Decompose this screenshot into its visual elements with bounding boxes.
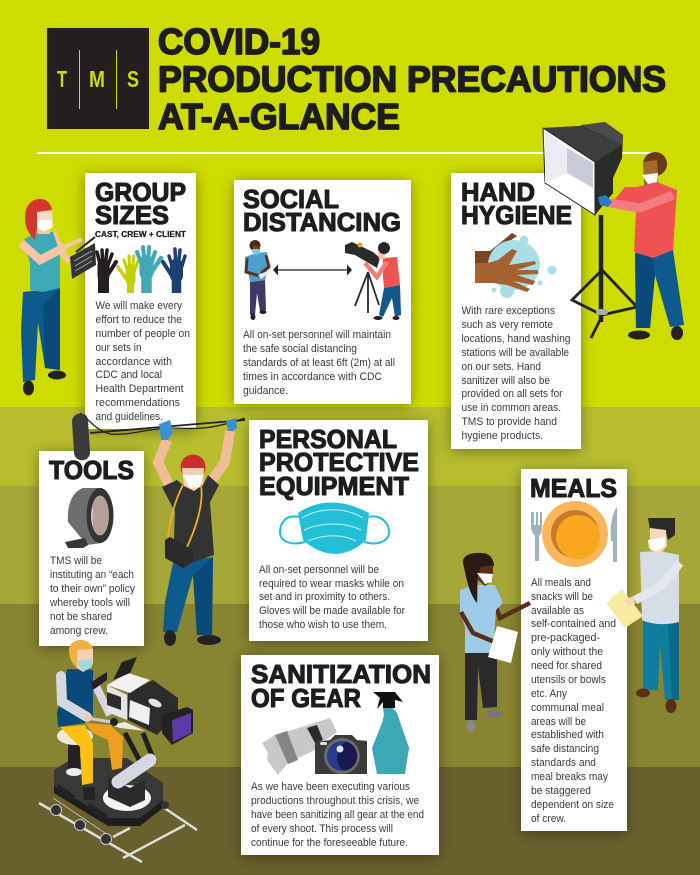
text: hand hygiene (462, 305, 570, 442)
text: meals: pre-packaged- (531, 632, 600, 644)
dolly platform (50, 758, 169, 844)
text: hand hygiene: locations, hand washing (462, 333, 570, 345)
text: sanitization of gear: productions throughout this crisis, we (251, 795, 419, 807)
text: hand hygiene: such as very remote (462, 319, 553, 331)
panel: social distancing (234, 180, 411, 404)
text: meals: etc. Any (531, 688, 567, 700)
text: tools: instituting an “each (50, 569, 134, 581)
text: meals: available as (531, 605, 584, 617)
text: group sizes: effort to reduce the (96, 314, 182, 326)
text: meals: be staggered (531, 785, 591, 797)
heading: personal protective equipment: PERSONAL (259, 424, 397, 454)
logo: TMS: T (57, 66, 67, 92)
figure: boom operator (158, 431, 230, 646)
light stand (572, 215, 637, 338)
title: AT-A-GLANCE (158, 96, 400, 137)
heading: group sizes (95, 177, 186, 239)
heading: sanitization of gear (251, 659, 431, 713)
text: personal protective equipment: All on-set personnel will be (259, 564, 379, 576)
heading: hand hygiene: HAND (461, 177, 535, 207)
text: personal protective equipment: those who wish to use them. (259, 619, 387, 631)
text: hand hygiene: use in common areas. (462, 402, 561, 414)
text: meals: established with (531, 729, 604, 741)
text: group sizes: Health Department (96, 383, 184, 395)
text: personal protective equipment: Gloves will be made available for (259, 605, 405, 617)
title: COVID-19 (158, 21, 320, 62)
text: hand hygiene: hygiene products. (462, 430, 543, 442)
text: meals: need for shared (531, 660, 602, 672)
text: social distancing: All on-set personnel will maintain (243, 329, 391, 341)
heading: hand hygiene: HYGIENE (461, 200, 572, 230)
figure: man with paper (606, 518, 680, 713)
text: personal protective equipment: set and in proximity to others. (259, 591, 390, 603)
text: meals: communal meal (531, 702, 604, 714)
text: group sizes: and guidelines. (96, 411, 163, 423)
heading: sanitization of gear: OF GEAR (251, 683, 361, 713)
heading: group sizes: GROUP (95, 177, 186, 207)
text: tools: whereby tools will (49, 597, 130, 609)
text: tools: among crew. (50, 625, 108, 637)
text: tools: to their own” policy (50, 583, 135, 595)
figure: crew member adjusting softbox light (543, 122, 684, 340)
panel: hand hygiene (451, 173, 581, 449)
text: social distancing: times in accordance with CDC (243, 371, 382, 383)
text: hand hygiene: stations will be available (462, 347, 569, 359)
text: hand hygiene: sanitizer will also be (462, 375, 550, 387)
heading: hand hygiene (461, 177, 572, 230)
heading: group sizes: CAST, CREW + CLIENT (95, 230, 186, 239)
text: meals: dependent on size (531, 799, 614, 811)
text: group sizes: accordance with (96, 356, 172, 368)
text: meals: only without the (531, 646, 603, 658)
camera arm (118, 733, 155, 782)
text: meals: All meals and (531, 577, 591, 589)
text: meals: meal breaks may (531, 771, 608, 783)
text: sanitization of gear: continue for the foreseeable future. (251, 837, 408, 849)
text: tools: TMS will be (50, 555, 102, 567)
panel: sanitization of gear (241, 655, 439, 855)
operator (57, 640, 123, 800)
heading: tools: TOOLS (49, 455, 134, 485)
text: personal protective equipment: required to wear masks while on (259, 578, 404, 590)
logo: TMS: M (89, 66, 105, 92)
icon: plate, fork and knife (531, 501, 617, 567)
text: group sizes: CDC and local (96, 369, 162, 381)
title (158, 21, 666, 137)
icon: spray bottle (372, 692, 409, 774)
text: meals (531, 577, 616, 825)
icon: washing hands with bubbles (475, 233, 556, 298)
text: hand hygiene: With rare exceptions (462, 305, 555, 317)
heading: personal protective equipment: EQUIPMENT (259, 471, 409, 501)
text: group sizes (96, 300, 190, 423)
panel: personal protective equipment (249, 420, 428, 641)
text: meals: standards and (531, 757, 596, 769)
seat (57, 727, 93, 776)
figure: masked person in blue (245, 240, 270, 320)
text: hand hygiene: on our sets. Hand (462, 361, 541, 373)
dolly rails (39, 803, 197, 862)
heading: social distancing: DISTANCING (243, 207, 401, 237)
text: hand hygiene: TMS to provide hand (462, 416, 557, 428)
text: meals: utensils or bowls (531, 674, 606, 686)
text: group sizes: We will make every (96, 300, 182, 312)
text: social distancing (243, 329, 395, 397)
logo: TMS (47, 28, 149, 129)
icon: surgical mask (280, 502, 389, 554)
icon: roll of tape (65, 488, 114, 548)
heading: personal protective equipment (259, 424, 419, 501)
softbox light (543, 122, 623, 215)
icon: camera with long lens (262, 718, 367, 775)
figure: woman with clapperboard (21, 199, 80, 396)
text: hand hygiene: provided on all sets for (462, 388, 563, 400)
broadcast camera (91, 657, 193, 745)
text: group sizes: our sets in (96, 342, 142, 354)
logo: TMS: S (127, 66, 139, 92)
heading: meals: MEALS (530, 473, 617, 503)
text: meals: snacks will be (531, 591, 593, 603)
text: meals: of crew. (531, 813, 566, 825)
text: meals: areas will be (531, 716, 586, 728)
icon: clapperboard (70, 237, 96, 279)
icon: four gloved hands (97, 247, 185, 293)
text: sanitization of gear: As we have been executing various (251, 781, 410, 793)
heading: sanitization of gear: SANITIZATION (251, 659, 431, 689)
panel: group sizes (85, 173, 196, 429)
text: tools (49, 555, 135, 637)
icon: boom microphone and pole (72, 413, 245, 460)
panel: meals (521, 469, 627, 831)
text: meals: self-contained and (531, 618, 616, 630)
text: social distancing: standards of at least 6ft (2m) at all (243, 357, 395, 369)
text: tools: not be shared (50, 611, 112, 623)
text: social distancing: the safe social distancing (243, 343, 357, 355)
heading: personal protective equipment: PROTECTIVE (259, 447, 419, 477)
text: group sizes: number of people on (96, 328, 190, 340)
panel: tools (39, 451, 144, 646)
figure: camera operator on dolly (39, 640, 197, 862)
text: personal protective equipment (259, 564, 405, 631)
text: meals: safe distancing (531, 743, 599, 755)
figure: woman with paper (460, 553, 530, 732)
heading: group sizes: SIZES (95, 200, 169, 230)
text: sanitization of gear: have been sanitizing all gear at the end (251, 809, 424, 821)
text: social distancing: guidance. (243, 385, 288, 397)
title: PRODUCTION PRECAUTIONS (158, 58, 666, 100)
text: group sizes: recommendations (96, 397, 180, 409)
heading: social distancing (243, 184, 401, 237)
text: sanitization of gear: of every shoot. This process will (251, 823, 393, 835)
figure: camera operator on tripod (345, 242, 401, 320)
arrow: six feet distance (273, 264, 352, 276)
heading: social distancing: SOCIAL (243, 184, 339, 214)
text: sanitization of gear (251, 781, 424, 849)
